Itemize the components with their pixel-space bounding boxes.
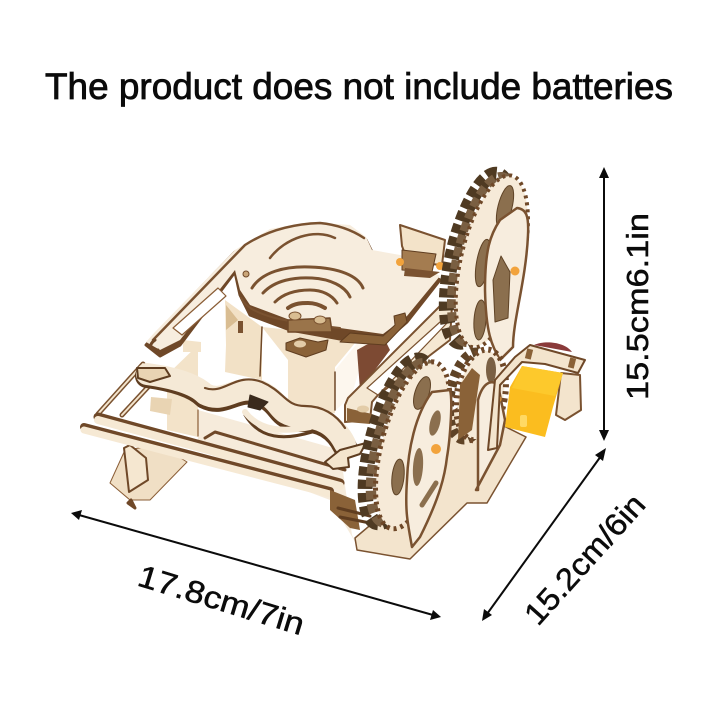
large front gear bbox=[351, 352, 465, 547]
spiral bowl rings bbox=[252, 267, 363, 308]
front support post bbox=[476, 382, 505, 490]
title: The product does not include batteries bbox=[45, 66, 673, 107]
floor and support panels bbox=[150, 300, 390, 550]
lower frame rails bbox=[84, 364, 345, 494]
left foot bbox=[110, 445, 187, 508]
dimension arrow: width bbox=[71, 510, 441, 620]
dimension label: width: 17.8cm/7in bbox=[134, 558, 309, 642]
wooden marble run product bbox=[84, 167, 585, 559]
yellow motor and bracket bbox=[488, 342, 585, 450]
lower wavy marble track bbox=[137, 368, 366, 469]
dimension label: depth: 15.2cm/6in bbox=[517, 487, 652, 632]
dimension label: height: 15.5cm6.1in bbox=[620, 213, 655, 400]
dimension arrow: height bbox=[599, 167, 609, 441]
large rear gear bbox=[433, 167, 542, 360]
marble chute with orange pegs bbox=[396, 225, 445, 278]
base platform bbox=[330, 400, 526, 559]
dimension arrow: depth bbox=[482, 448, 606, 621]
upper deck with spiral bowl bbox=[146, 222, 445, 357]
deck pegs and tabs bbox=[243, 271, 407, 357]
small middle gear bbox=[443, 346, 513, 444]
middle long guide panel bbox=[345, 305, 452, 424]
